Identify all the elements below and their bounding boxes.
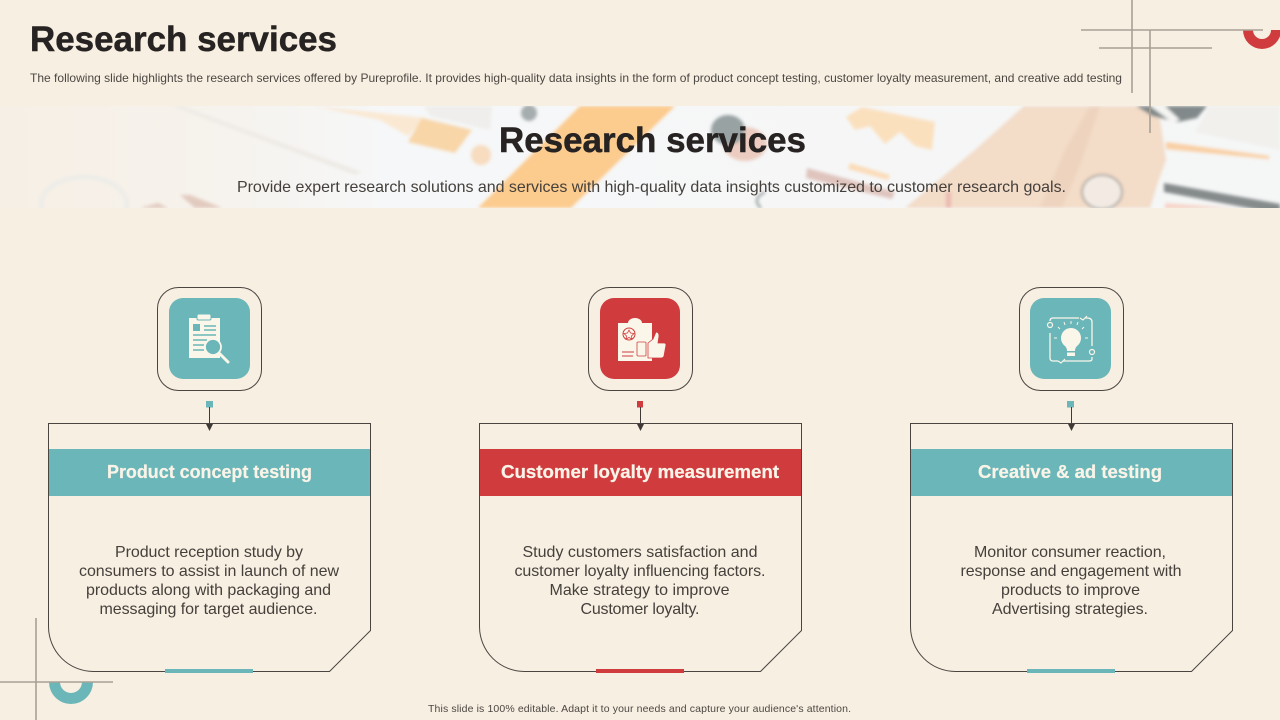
panel: product concept testing <box>48 288 370 673</box>
decoration: bottom left teal ring and lines <box>0 618 113 720</box>
accent bar <box>165 669 253 673</box>
card header <box>49 449 370 496</box>
decoration: top right red ring and lines <box>1081 0 1280 133</box>
title: Research services <box>30 20 337 59</box>
icon frame <box>158 288 262 390</box>
card text <box>514 544 766 618</box>
card outline <box>910 424 1232 672</box>
accent bar <box>596 669 684 673</box>
card text: Study customers satisfaction and <box>522 544 758 561</box>
icon frame <box>588 288 692 390</box>
footer note: This slide is 100% editable. Adapt it to your needs and capture your audience's attention. <box>428 703 851 715</box>
card text: response and engagement with <box>960 563 1182 580</box>
card text: consumers to assist in launch of new <box>79 563 339 580</box>
card header: Creative & ad testing <box>978 461 1162 482</box>
connector arrow <box>637 401 644 431</box>
card text: Advertising strategies. <box>992 601 1148 618</box>
card text: customer loyalty influencing factors. <box>514 563 766 580</box>
panel: creative and ad testing <box>910 288 1232 673</box>
icon: clipboard with magnifier <box>169 298 250 379</box>
banner photo <box>40 106 1280 208</box>
card outline <box>48 424 370 672</box>
banner heading: Research services <box>499 121 806 160</box>
card outline <box>480 424 802 672</box>
card text <box>79 544 339 618</box>
connector arrow <box>1067 401 1075 431</box>
card header: Product concept testing <box>107 461 312 482</box>
card header <box>911 449 1232 496</box>
connector arrow <box>206 401 213 431</box>
card text: products along with packaging and <box>86 582 331 599</box>
card text: products to improve <box>1001 582 1140 599</box>
icon: light bulb with cycle arrows <box>1030 298 1111 379</box>
card text: Customer loyalty. <box>580 601 700 618</box>
icon frame <box>1020 288 1124 390</box>
icon: clipboard with thumbs up <box>600 298 680 379</box>
panel: customer loyalty measurement <box>480 288 802 673</box>
banner description: Provide expert research solutions and services with high-quality data insights customized to customer research goals. <box>237 179 1066 196</box>
card text: Monitor consumer reaction, <box>974 544 1166 561</box>
card header: Customer loyalty measurement <box>501 461 779 482</box>
card header <box>480 449 801 496</box>
card text: Make strategy to improve <box>550 582 730 599</box>
card text <box>960 544 1182 618</box>
subtitle text: The following slide highlights the research services offered by Pureprofile. It provides high-quality data insights in the form of product concept testing, customer loyalty measurement, and creative add testing <box>30 71 1122 85</box>
accent bar <box>1027 669 1115 673</box>
card text: Product reception study by <box>115 544 303 561</box>
card text: messaging for target audience. <box>100 601 318 618</box>
